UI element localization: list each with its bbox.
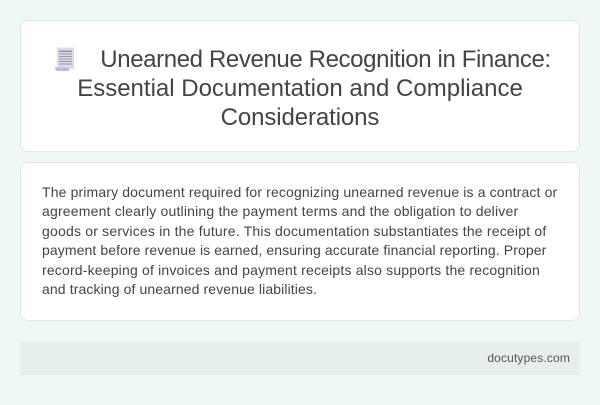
text block: description: payment before revenue is earned, ensuring accurate financial reporting. Proper (42, 242, 546, 258)
footer text: docutypes.com (487, 351, 570, 365)
panel: title card (20, 20, 580, 152)
text block: description (42, 184, 557, 297)
title (77, 46, 551, 131)
title: Considerations (221, 104, 379, 131)
text block: description: goods or services in the future. This documentation substantiates the receipt of (42, 223, 546, 239)
icon: document receipt (55, 47, 74, 71)
text block: description: and tracking of unearned revenue liabilities. (42, 281, 317, 297)
title: Unearned Revenue Recognition in Finance: (100, 46, 551, 73)
title: Essential Documentation and Compliance (77, 75, 523, 102)
text block: description: record-keeping of invoices and payment receipts also supports the recognition (42, 262, 540, 278)
text block: description: The primary document required for recognizing unearned revenue is a contract or (42, 184, 557, 200)
panel: description card (20, 162, 580, 321)
footer bar (20, 341, 580, 375)
text block: description: agreement clearly outlining the payment terms and the obligation to deliver (42, 203, 518, 219)
